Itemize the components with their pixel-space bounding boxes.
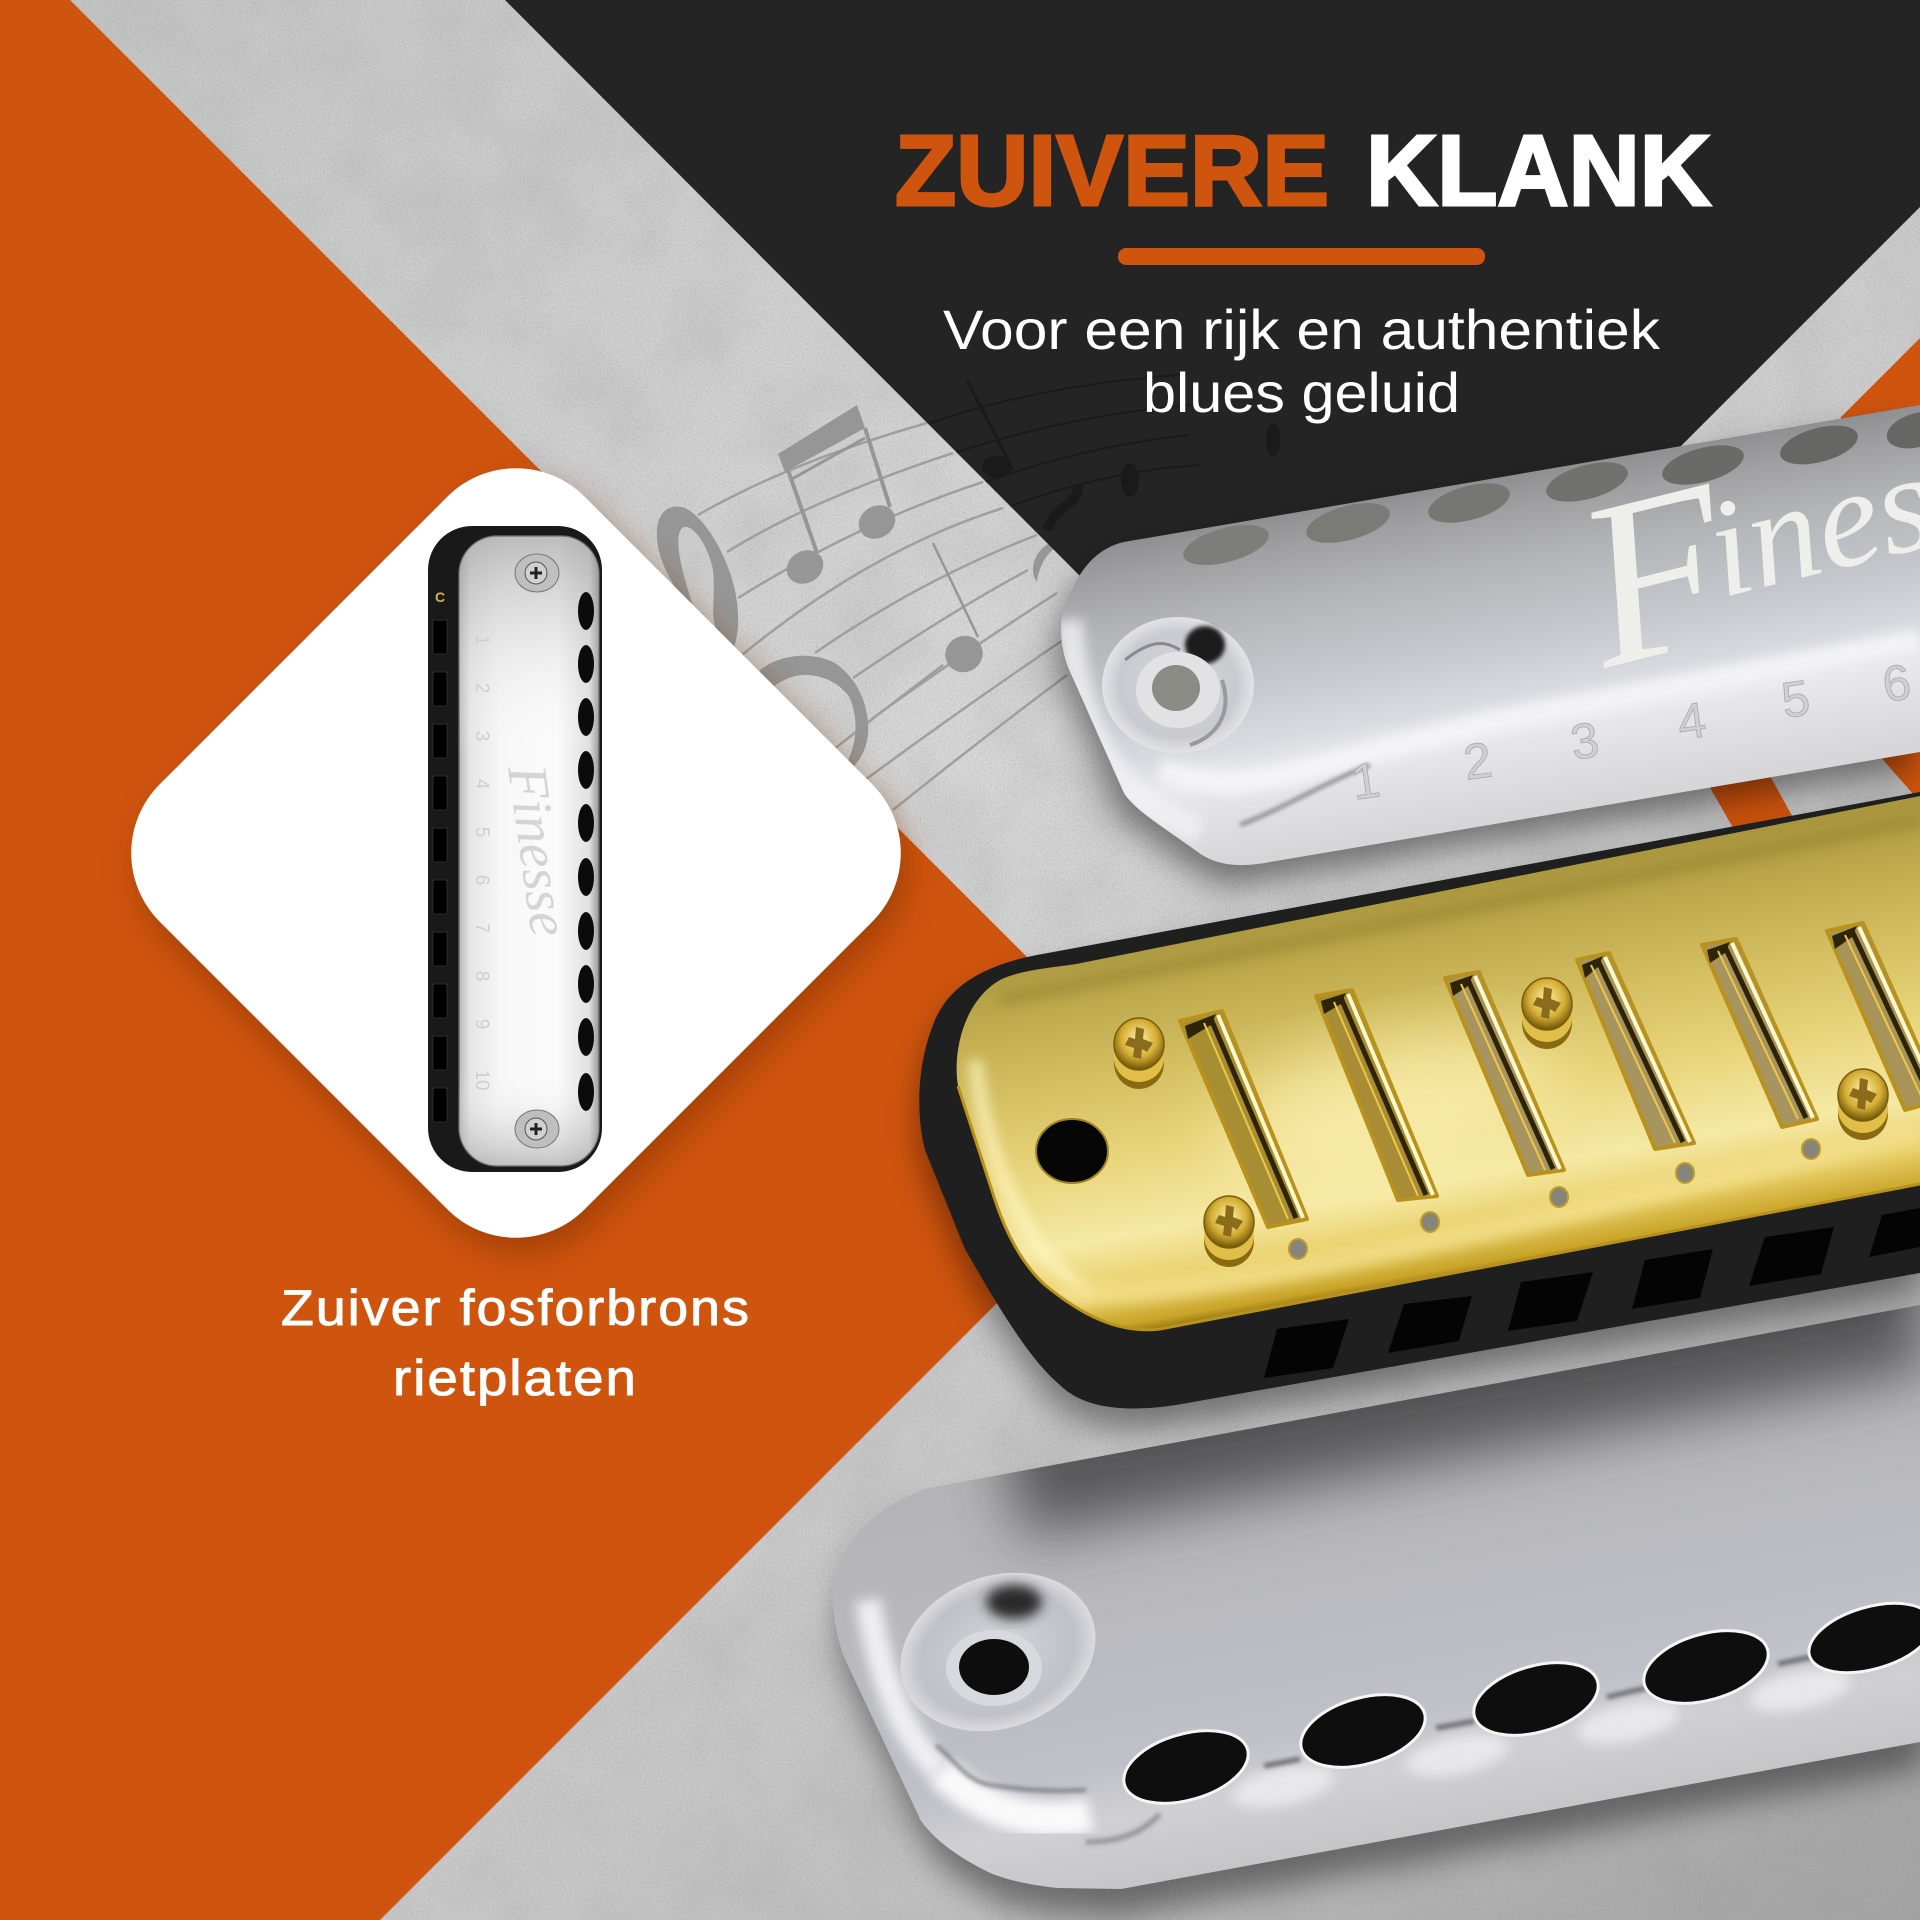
panel: dark title shape xyxy=(505,0,1920,811)
hole numbers: 5 xyxy=(471,827,492,837)
title: ZUIVERE xyxy=(895,115,1329,227)
subtitle: blues geluid xyxy=(1143,361,1460,424)
caption: Zuiver fosforbrons rietplaten: rietplaten xyxy=(393,1350,638,1406)
hole numbers: 3 xyxy=(1567,712,1602,771)
title xyxy=(895,115,1711,227)
hole numbers: 1 xyxy=(471,635,492,645)
chrome plate xyxy=(459,536,599,1166)
music notes and staff lines xyxy=(657,405,1067,810)
treble clef xyxy=(657,506,1055,767)
hole numbers: 1 xyxy=(1348,752,1383,811)
logo: Finesse xyxy=(495,760,580,940)
subtitle xyxy=(943,298,1661,424)
hole numbers: 6 xyxy=(471,875,492,885)
gold screws xyxy=(1114,978,1888,1267)
small rivets xyxy=(1289,1139,1820,1259)
hole numbers: 3 xyxy=(471,731,492,741)
chrome highlights xyxy=(1070,620,1200,830)
hole numbers: 7 xyxy=(471,923,492,933)
gold bottom rim xyxy=(958,1086,1920,1330)
hole numbers: 8 xyxy=(471,971,492,981)
icon: bottom silver harmonica cover xyxy=(832,1305,1920,1915)
hole numbers: 4 xyxy=(471,779,492,790)
hole numbers xyxy=(471,635,492,1091)
rivet xyxy=(1102,617,1254,753)
black comb body xyxy=(919,792,1920,1408)
hole numbers: 6 xyxy=(1879,654,1914,713)
panel: white diamond xyxy=(91,428,948,1294)
air holes xyxy=(1179,405,1920,573)
chrome highlights xyxy=(868,1600,940,1770)
screws xyxy=(515,554,559,1148)
mounting hole xyxy=(1036,1119,1108,1183)
orange accents behind the harmonicas xyxy=(1700,338,1920,840)
gold slots: dark top shadow xyxy=(1185,926,1857,1039)
comb slots xyxy=(433,620,447,1122)
gold slots: recess xyxy=(1180,923,1920,1227)
air holes xyxy=(1115,1591,1920,1816)
subtitle: Voor een rijk en authentiek xyxy=(943,298,1661,361)
hole numbers xyxy=(1348,654,1914,811)
panel: orange diagonal shape xyxy=(0,0,1185,1920)
gold cover plate xyxy=(957,796,1920,1330)
air holes xyxy=(578,592,594,1111)
icon: small harmonica product photo xyxy=(428,526,602,1172)
rivet xyxy=(878,1546,1118,1758)
faint notes on the dark panel xyxy=(930,375,1280,530)
title: KLANK xyxy=(1366,115,1711,227)
caption: Zuiver fosforbrons rietplaten: Zuiver fosforbrons xyxy=(281,1280,751,1336)
gold slots: right walls xyxy=(1204,927,1920,1219)
logo: F xyxy=(1552,430,1759,718)
hole numbers: 10 xyxy=(471,1069,492,1091)
harmonica black body xyxy=(428,526,602,1172)
hole numbers: 4 xyxy=(1674,692,1709,751)
icon: gold harmonica xyxy=(919,792,1920,1428)
key letter: C xyxy=(435,589,445,605)
caption: Zuiver fosforbrons rietplaten xyxy=(281,1280,751,1406)
hole numbers: 2 xyxy=(1460,732,1495,791)
hole numbers: 9 xyxy=(471,1019,492,1029)
beamed eighth notes xyxy=(778,405,989,679)
divider bar xyxy=(1118,248,1485,265)
comb windows xyxy=(1264,1208,1920,1378)
hole numbers: 5 xyxy=(1778,670,1813,729)
logo xyxy=(1591,482,1920,668)
gold reflections xyxy=(975,1060,1090,1295)
icon: top silver harmonica cover xyxy=(1055,351,1920,883)
shadow band along top edge xyxy=(1010,1305,1920,1473)
hole numbers: 2 xyxy=(471,683,492,693)
